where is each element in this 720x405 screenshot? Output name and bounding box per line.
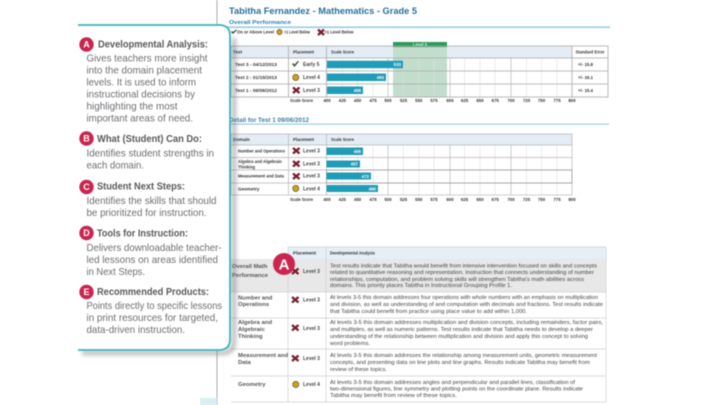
table: overall performance: Scale Score <box>331 50 354 54</box>
axis: detail scale score: 775 <box>553 197 561 202</box>
axis: detail scale score: 725 <box>523 197 531 202</box>
axis: detail scale score: 625 <box>461 197 469 202</box>
section D: tools for instruction: in Next Steps. <box>86 267 145 278</box>
row: test 1: Test 1 - 09/06/2012 <box>235 88 277 93</box>
section rule: detail <box>231 124 609 125</box>
section E: recommended products <box>79 285 222 336</box>
row: measurement and data: Measurement and <box>238 353 288 359</box>
report title: Tabitha Fernandez - Mathematics - Grade 5 <box>229 6 417 16</box>
row: overall math performance: Performance <box>232 273 269 279</box>
row: test 3 <box>235 61 593 68</box>
axis: detail scale score: 650 <box>476 197 484 202</box>
axis: detail scale score: 575 <box>430 197 438 202</box>
row: test 3: 533 <box>394 62 402 67</box>
section C: student next steps: Identifies the skills that should <box>86 196 217 207</box>
axis: overall scale score: 625 <box>461 98 469 103</box>
row: geometry: Level 4 <box>303 186 320 192</box>
row: geometry: Geometry <box>238 382 266 388</box>
table: domain detail: Placement <box>293 137 314 142</box>
row: algebra and algebraic thinking: Thinking <box>238 334 263 340</box>
axis: detail scale score: 425 <box>339 197 347 202</box>
row: test 3: Early 5 <box>303 62 320 68</box>
row: overall math performance: domains. This priority places Tabitha in Instructional Grouping Profile 1. <box>330 283 512 289</box>
row: test 3: +/- 15.8 <box>578 62 593 67</box>
section A: developmental analysis: highlighting the most <box>86 102 178 112</box>
row: number and operations: 456 <box>354 149 362 154</box>
table: overall performance <box>231 42 608 97</box>
table: domain detail: Scale Score <box>331 137 354 142</box>
section B: what student can do: What (Student) Can Do: <box>97 134 202 145</box>
axis: overall scale score: Scale Score <box>290 98 313 103</box>
section E: recommended products: Points directly to specific lessons <box>86 301 222 312</box>
section heading: detail for test 1: Detail for Test 1 09/06/2012 <box>229 117 310 124</box>
section B: what student can do: B <box>83 134 90 144</box>
section C: student next steps: Student Next Steps: <box>97 182 185 192</box>
axis: overall scale score: 775 <box>553 98 561 103</box>
legend: >1 Level Below <box>324 30 354 34</box>
level 5 band: Level 5 <box>413 42 428 47</box>
row: geometry <box>238 380 583 399</box>
axis: overall scale score <box>290 98 576 103</box>
row: test 2: 493 <box>377 75 385 80</box>
axis: overall scale score: 450 <box>354 98 362 103</box>
row: measurement and data: Measurement and Data <box>238 174 284 178</box>
row: algebra and algebraic thinking: Algebraic <box>238 327 266 333</box>
row: test 2: Test 2 - 01/15/2013 <box>235 75 277 80</box>
section B: what student can do: Identifies student strengths in <box>86 148 214 160</box>
legend <box>231 30 354 35</box>
table: developmental analysis <box>231 247 606 402</box>
axis: detail scale score: Scale Score <box>290 197 313 202</box>
axis: overall scale score: 725 <box>523 98 531 103</box>
axis: overall scale score: 800 <box>568 98 576 103</box>
axis: overall scale score: 425 <box>339 98 347 103</box>
row: measurement and data <box>238 172 371 180</box>
row: measurement and data: 472 <box>362 174 370 179</box>
row: measurement and data: concepts, and presenting data on line plots and line graphs. Results indicate Tabitha may benefit from <box>330 360 590 366</box>
axis: detail scale score: 700 <box>507 197 515 202</box>
axis: detail scale score: 525 <box>400 197 408 202</box>
callout badge A: A <box>279 256 290 274</box>
section C: student next steps: C <box>83 182 90 192</box>
row: algebra and algebraic thinking: Level 3 <box>303 326 320 332</box>
section E: recommended products: in print resources for targeted, <box>86 313 218 324</box>
section D: tools for instruction: led lessons on areas identified <box>86 255 218 266</box>
section heading: overall performance: Overall Performance <box>229 20 291 26</box>
section A: developmental analysis: instructional decisions by <box>86 90 196 100</box>
row: algebra and algebraic thinking: Level 3 <box>303 162 320 168</box>
row: geometry: Geometry <box>238 186 260 192</box>
row: overall math performance <box>232 264 597 289</box>
row: overall math performance: Test results indicate that Tabitha would benefit from intensive intervention focused on skills and concepts <box>330 264 597 270</box>
axis: detail scale score: 750 <box>538 197 546 202</box>
axis: overall scale score: 400 <box>323 98 331 103</box>
row: overall math performance: Overall Math <box>232 264 268 270</box>
row: geometry: Tabitha may benefit from review of these topics. <box>330 393 457 399</box>
panel shadow <box>82 38 234 353</box>
row: algebra and algebraic thinking: and multiples, as well as numeric patterns. Test results indicate that Tabitha needs to develop a deeper <box>330 327 593 333</box>
table: domain detail <box>231 134 572 195</box>
row: algebra and algebraic thinking: At levels 3-5 this domain addresses multiplication and division concepts, including remainders, factor pairs, <box>330 320 603 326</box>
section D: tools for instruction <box>79 226 222 278</box>
callout badge A <box>273 253 295 275</box>
row: number and operations: that Tabitha could benefit from practice using place value to add within 1,000. <box>330 309 527 315</box>
section rule: overall performance <box>225 26 610 28</box>
axis: detail scale score: 800 <box>568 197 576 202</box>
icon: cross <box>318 30 324 35</box>
row: number and operations: At levels 3-5 this domain addresses four operations with whole numbers with an emphasis on multiplication <box>330 295 598 301</box>
row: geometry <box>238 185 378 192</box>
section A: developmental analysis: Developmental Analysis: <box>98 40 208 50</box>
row: number and operations: Number and <box>238 296 273 302</box>
axis: detail scale score: 450 <box>354 197 362 202</box>
axis: overall scale score: 550 <box>415 98 423 103</box>
section D: tools for instruction: D <box>83 228 90 238</box>
section C: student next steps <box>79 180 217 219</box>
row: test 1: Level 3 <box>303 88 320 94</box>
axis: overall scale score: 675 <box>492 98 499 103</box>
row: algebra and algebraic thinking: word problems. <box>329 341 370 347</box>
row: measurement and data: Level 3 <box>303 356 320 362</box>
table: developmental analysis: Placement <box>293 250 316 256</box>
row: measurement and data: Level 3 <box>303 174 320 180</box>
table: overall performance: Placement <box>293 50 314 54</box>
table: overall performance: Test <box>233 50 243 54</box>
axis: overall scale score: 500 <box>384 98 392 103</box>
row: overall math performance: relationships, computation, and problem solving skills will strengthen Tabitha's math abilities across <box>330 277 584 283</box>
row: algebra and algebraic thinking: 457 <box>351 162 359 166</box>
icon: check <box>231 30 237 34</box>
row: algebra and algebraic thinking: Thinking <box>238 164 255 170</box>
section A: developmental analysis <box>79 37 208 124</box>
panel: legend of report sections <box>78 25 230 350</box>
table: overall performance: Standard Error <box>576 50 605 54</box>
row: algebra and algebraic thinking: understanding of the relationship between multiplication and division and apply this concept to solving <box>330 334 588 340</box>
legend: On or Above Level <box>237 30 274 34</box>
axis: overall scale score: 600 <box>446 98 454 103</box>
row: number and operations: and division, as well as understanding of and computation with decimals and fractions. Test results indicate <box>330 302 603 308</box>
section A: developmental analysis: Gives teachers more insight <box>86 54 208 64</box>
row: measurement and data: At levels 3-5 this domain addresses the relationship among measurement units, geometric measurement <box>330 353 597 359</box>
row: test 2: +/- 16.1 <box>578 75 593 80</box>
row: geometry: two-dimensional figures, line symmetry and plotting points on the coordinate plane. Results indicate <box>330 386 583 392</box>
row: number and operations: Operations <box>238 302 270 308</box>
section B: what student can do <box>79 131 214 172</box>
section A: developmental analysis: into the domain placement <box>86 66 202 76</box>
section C: student next steps: be prioritized for instruction. <box>86 208 206 219</box>
row: algebra and algebraic thinking: Algebra and Algebraic <box>238 159 282 164</box>
row: algebra and algebraic thinking <box>238 159 360 170</box>
axis: overall scale score: 700 <box>507 98 515 103</box>
row: test 3: Test 3 - 04/12/2013 <box>235 62 277 67</box>
report page edge <box>200 0 218 405</box>
section A: developmental analysis: A <box>83 40 90 50</box>
row: overall math performance: related to quantitative reasoning and representation. Instruction that connects understanding of number <box>330 270 594 276</box>
axis: detail scale score: 675 <box>492 197 499 202</box>
axis: detail scale score <box>290 197 576 202</box>
row: number and operations: Level 3 <box>303 298 320 304</box>
section E: recommended products: Recommended Products: <box>97 287 209 298</box>
table: developmental analysis: Developmental Analysis <box>330 250 375 256</box>
row: measurement and data: review of these topics. <box>330 367 387 373</box>
axis: detail scale score: 550 <box>415 197 423 202</box>
icon: octagon <box>277 30 282 34</box>
row: overall math performance: Level 3 <box>303 269 320 275</box>
axis: detail scale score: 600 <box>446 197 454 202</box>
section E: recommended products: E <box>83 287 90 297</box>
row: number and operations <box>238 295 603 315</box>
row: geometry: At levels 3-5 this domain addresses angles and perpendicular and parallel lines, classification of <box>330 380 575 386</box>
section D: tools for instruction: Tools for Instruction: <box>97 228 188 240</box>
row: measurement and data <box>238 353 597 373</box>
section A: developmental analysis: important areas of need. <box>86 114 193 124</box>
section A: developmental analysis: levels. It is used to inform <box>86 78 196 88</box>
row: test 1: +/- 15.4 <box>578 88 593 93</box>
section E: recommended products: data-driven instruction. <box>86 325 185 336</box>
row: algebra and algebraic thinking: Algebra and <box>238 320 272 326</box>
row: test 1: 456 <box>354 88 362 93</box>
axis: detail scale score: 400 <box>323 197 331 202</box>
row: number and operations <box>238 148 363 155</box>
axis: overall scale score: 575 <box>430 98 438 103</box>
row: geometry: Level 4 <box>303 382 320 388</box>
row: test 1 <box>235 86 593 94</box>
axis: detail scale score: 475 <box>369 197 377 202</box>
row: number and operations: Level 3 <box>303 148 320 154</box>
axis: overall scale score: 650 <box>476 98 484 103</box>
legend: =1 Level Below <box>284 30 310 34</box>
row: test 2: Level 4 <box>303 75 320 81</box>
row: algebra and algebraic thinking <box>238 320 603 347</box>
section D: tools for instruction: Delivers downloadable teacher- <box>86 243 222 254</box>
level 5 band <box>393 42 447 97</box>
row: measurement and data: Data <box>238 360 251 366</box>
axis: detail scale score: 500 <box>384 197 392 202</box>
row: test 2 <box>235 74 593 81</box>
row: number and operations: Number and Operations <box>238 148 285 154</box>
row: geometry: 490 <box>369 186 377 192</box>
axis: overall scale score: 525 <box>400 98 408 103</box>
axis: overall scale score: 750 <box>538 98 546 103</box>
axis: overall scale score: 475 <box>369 98 377 103</box>
table: domain detail: Domain <box>233 137 250 142</box>
section B: what student can do: each domain. <box>86 160 144 172</box>
